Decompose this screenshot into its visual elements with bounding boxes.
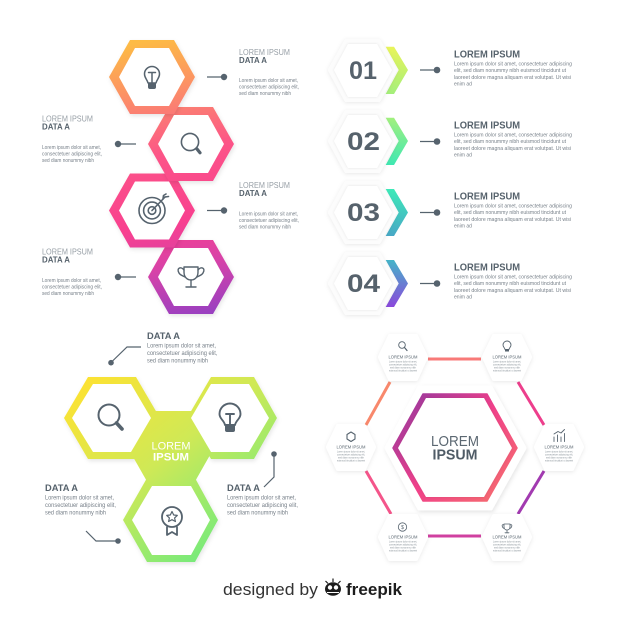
callout: data A step 2: consectetuer adipiscing elit, <box>42 152 102 158</box>
callout: data A step 3: LOREM IPSUM <box>239 181 290 190</box>
callout: top data A: Lorem ipsum dolor sit amet, <box>147 344 216 350</box>
node: top right, bulb: Lorem ipsum dolor sit amet, <box>493 360 521 364</box>
step 01: LOREM IPSUM <box>454 50 520 60</box>
step 04: enim ad <box>454 294 472 300</box>
hexagon chain shapes <box>109 40 234 314</box>
callout: right data A: Lorem ipsum dolor sit amet, <box>227 496 296 502</box>
node: top right, bulb: euismod tincidunt ut laoreet <box>493 368 521 372</box>
node: right, chart: euismod tincidunt ut laoreet <box>545 458 573 462</box>
step 02: enim ad <box>454 152 472 158</box>
callout: data A step 3: consectetuer adipiscing elit, <box>239 218 299 224</box>
node: right, chart: consectetuer adipiscing elit, <box>545 452 573 456</box>
step 02: laoreet dolore magna aliquam erat volutpat. Ut wisi <box>454 146 571 152</box>
node: bottom right, trophy: consectetuer adipiscing elit, <box>493 542 521 546</box>
callout: left data A: consectetuer adipiscing elit, <box>45 503 116 509</box>
panel: vertical hexagon chain <box>42 40 299 314</box>
step 03: elit, sed diam nonummy nibh euismod tincidunt ut <box>454 210 566 216</box>
callout: data A step 3: Lorem ipsum dolor sit amet, <box>239 212 298 218</box>
footer: designed by freepik <box>223 578 403 599</box>
step 01: Lorem ipsum dolor sit amet, consectetuer adipiscing <box>454 62 572 68</box>
node: bottom right, trophy: LOREM IPSUM <box>492 534 522 540</box>
node: left, gear: LOREM IPSUM <box>336 444 366 450</box>
node: bottom right, trophy: Lorem ipsum dolor sit amet, <box>493 540 521 544</box>
step 02: Lorem ipsum dolor sit amet, consectetuer adipiscing <box>454 132 572 138</box>
center label: IPSUM <box>153 452 189 464</box>
callout: data A step 4 <box>42 248 136 297</box>
node: bottom left, coin: consectetuer adipiscing elit, <box>389 542 417 546</box>
central hexagon: IPSUM <box>432 446 478 464</box>
callout: data A step 4: LOREM IPSUM <box>42 248 93 256</box>
step 02: elit, sed diam nonummy nibh euismod tincidunt ut <box>454 139 566 145</box>
step 04: elit, sed diam nonummy nibh euismod tincidunt ut <box>454 281 566 287</box>
node: top left, magnifier: LOREM IPSUM <box>388 354 418 360</box>
node: bottom right, trophy: sed diam nonummy nibh <box>494 546 520 550</box>
icon: light bulb <box>220 404 240 432</box>
callout: data A step 1: LOREM IPSUM <box>239 48 290 57</box>
callout: data A step 1 <box>207 48 299 97</box>
node: bottom left, coin: sed diam nonummy nibh <box>390 546 416 550</box>
callout: data A step 2: Lorem ipsum dolor sit amet, <box>42 145 101 151</box>
step 01: laoreet dolore magna aliquam erat volutpat. Ut wisi <box>454 75 571 81</box>
connector bars <box>366 359 544 536</box>
callout: data A step 3: DATA A <box>239 189 267 198</box>
central hexagon: LOREM <box>431 433 479 450</box>
callout: data A step 2: LOREM IPSUM <box>42 114 93 124</box>
node: top left, magnifier: sed diam nonummy nibh <box>390 366 416 370</box>
node: bottom left, coin: $ <box>401 525 404 531</box>
callout: top data A <box>108 331 218 366</box>
callout: data A step 1: consectetuer adipiscing elit, <box>239 84 299 90</box>
callout: left data A: Lorem ipsum dolor sit amet, <box>45 496 114 502</box>
step 03: Lorem ipsum dolor sit amet, consectetuer adipiscing <box>454 204 572 210</box>
step 04: Lorem ipsum dolor sit amet, consectetuer adipiscing <box>454 274 572 280</box>
step 01: 01 <box>349 57 377 85</box>
node: bottom left, coin: LOREM IPSUM <box>388 534 418 540</box>
step 03: LOREM IPSUM <box>454 192 520 202</box>
node: top right, bulb: LOREM IPSUM <box>492 354 522 360</box>
callout: right data A: sed diam nonummy nibh <box>227 510 288 516</box>
step 03: enim ad <box>454 224 472 230</box>
icon: freepik bee logo <box>325 578 341 596</box>
callout: data A step 1: sed diam nonummy nibh <box>239 91 291 97</box>
node: bottom right, trophy: euismod tincidunt ut laoreet <box>493 548 521 552</box>
central hexagon <box>386 387 525 509</box>
icon: magnifier <box>98 404 122 429</box>
node: top left, magnifier: euismod tincidunt ut laoreet <box>389 368 417 372</box>
callout: data A step 4: sed diam nonummy nibh <box>42 291 94 297</box>
callout: data A step 3 <box>207 181 299 230</box>
callout: right data A: DATA A <box>227 483 261 493</box>
callout: left data A <box>45 483 121 544</box>
node: top left, magnifier <box>380 336 426 379</box>
node: left, gear: Lorem ipsum dolor sit amet, <box>337 450 365 454</box>
step 04: LOREM IPSUM <box>454 262 520 274</box>
node: left, gear <box>328 426 374 469</box>
node: right, chart: sed diam nonummy nibh <box>546 456 572 460</box>
footer: designed by freepik: designed by <box>223 580 319 599</box>
callout: top data A: consectetuer adipiscing elit, <box>147 351 218 357</box>
callout: top data A: sed diam nonummy nibh <box>147 358 208 364</box>
callout: right data A <box>227 451 298 516</box>
callout: data A step 2: DATA A <box>42 122 70 132</box>
icon: award badge <box>162 507 182 535</box>
footer: designed by freepik: freepik <box>346 580 403 599</box>
callout: data A step 1: DATA A <box>239 56 267 65</box>
node: bottom left, coin <box>380 516 426 559</box>
step 03: 03 <box>347 199 380 227</box>
callout: right data A: consectetuer adipiscing elit, <box>227 503 298 509</box>
node: bottom left, coin: euismod tincidunt ut laoreet <box>389 548 417 552</box>
node: top right, bulb <box>484 336 530 379</box>
callout: left data A: DATA A <box>45 483 79 493</box>
node: left, gear: consectetuer adipiscing elit, <box>337 452 365 456</box>
icon: target with arrow <box>139 194 168 224</box>
panel: three-hexagon cluster <box>45 331 298 562</box>
node: top right, bulb: consectetuer adipiscing elit, <box>493 362 521 366</box>
step 03 <box>330 182 572 242</box>
callout: data A step 1: Lorem ipsum dolor sit amet, <box>239 78 298 84</box>
callout: data A step 4: consectetuer adipiscing elit, <box>42 284 102 290</box>
callout: data A step 3: sed diam nonummy nibh <box>239 224 291 230</box>
step 02: 02 <box>347 128 380 156</box>
node: top right, bulb: sed diam nonummy nibh <box>494 366 520 370</box>
icon: magnifier <box>181 133 200 153</box>
callout: data A step 2: sed diam nonummy nibh <box>42 158 94 164</box>
icon: light bulb <box>144 66 160 89</box>
step 04: laoreet dolore magna aliquam erat volutpat. Ut wisi <box>454 288 571 294</box>
step 01: enim ad <box>454 82 472 88</box>
node: bottom left, coin: Lorem ipsum dolor sit amet, <box>389 540 417 544</box>
callout: top data A: DATA A <box>147 331 181 341</box>
step 03: laoreet dolore magna aliquam erat volutpat. Ut wisi <box>454 217 571 223</box>
node: right, chart: LOREM IPSUM <box>544 444 574 450</box>
callout: left data A: sed diam nonummy nibh <box>45 510 106 516</box>
step 02: LOREM IPSUM <box>454 120 520 132</box>
panel: numbered list 01 to 04 <box>330 40 572 314</box>
node: right, chart: Lorem ipsum dolor sit amet, <box>545 450 573 454</box>
callout: data A step 4: Lorem ipsum dolor sit amet, <box>42 278 101 284</box>
step 04: 04 <box>347 270 380 298</box>
panel: hexagon ring with six nodes <box>328 336 582 559</box>
center label <box>152 440 190 464</box>
center label: LOREM <box>152 440 190 452</box>
node: top left, magnifier: consectetuer adipiscing elit, <box>389 362 417 366</box>
icon: trophy <box>178 267 204 287</box>
callout: data A step 2 <box>42 114 136 164</box>
step 01: elit, sed diam nonummy nibh euismod tincidunt ut <box>454 68 566 74</box>
node: left, gear: sed diam nonummy nibh <box>338 456 364 460</box>
cluster hexagon shapes <box>64 377 277 562</box>
node: right, chart <box>536 426 582 469</box>
node: bottom right, trophy <box>484 516 530 559</box>
node: left, gear: euismod tincidunt ut laoreet <box>337 458 365 462</box>
node: top left, magnifier: Lorem ipsum dolor sit amet, <box>389 360 417 364</box>
callout: data A step 4: DATA A <box>42 256 70 264</box>
step 01 <box>330 40 572 100</box>
step 02 <box>330 112 572 172</box>
step 04 <box>330 254 572 314</box>
